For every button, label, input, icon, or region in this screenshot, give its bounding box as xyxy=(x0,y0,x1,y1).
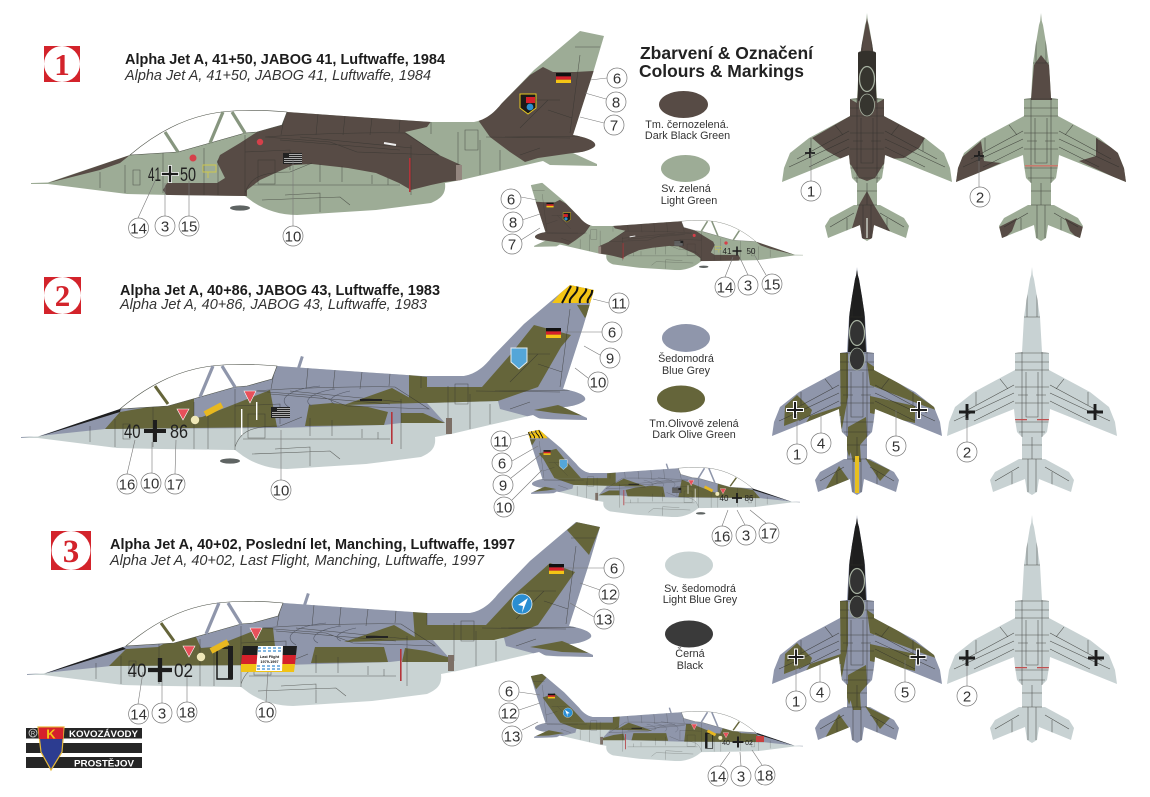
aircraft: large side view 1: 41 xyxy=(148,165,161,186)
aircraft: large side view 3: 40 xyxy=(128,661,146,682)
aircraft: underside view 2 xyxy=(942,262,1122,502)
panel: scheme 3 xyxy=(16,510,1122,786)
swatch: dark olive green: Dark Olive Green xyxy=(652,429,736,441)
callouts: scheme 1 numbers: 2 xyxy=(976,190,984,206)
swatch: blue grey xyxy=(658,324,714,377)
callouts: scheme 3 numbers: 12 xyxy=(601,586,617,604)
callouts: scheme 2 numbers: 10 xyxy=(273,482,289,500)
decal: Last Flight banner: 1979-1997 xyxy=(260,660,279,664)
heading: scheme 2 title xyxy=(119,282,440,313)
heading: legend title: Zbarvení & Označení xyxy=(640,43,814,63)
heading: scheme 1 title xyxy=(124,51,446,84)
aircraft: small side view 1: 50 xyxy=(747,247,756,256)
aircraft: underside view 3 xyxy=(942,510,1122,750)
callouts: scheme 2 numbers: 9 xyxy=(606,350,614,368)
swatch: dark black green: Dark Black Green xyxy=(645,130,730,142)
callouts: scheme 2 numbers: 10 xyxy=(143,476,159,492)
decal: Last Flight banner xyxy=(241,646,297,672)
heading: legend title: Colours & Markings xyxy=(639,61,804,81)
aircraft: top view 3 xyxy=(767,510,947,750)
callouts: scheme 3 numbers: 18 xyxy=(179,704,195,722)
callouts: scheme 1 numbers xyxy=(129,68,990,297)
heading: scheme 1 title: Alpha Jet A, 41+50, JABOG 41, Luftwaffe, 1984 xyxy=(124,68,431,84)
aircraft: large side view 1 xyxy=(20,20,620,230)
callouts: scheme 3 numbers: 6 xyxy=(610,560,618,578)
callouts: scheme 3 numbers: 14 xyxy=(130,706,147,724)
aircraft: small side view 3 xyxy=(523,668,808,768)
callouts: scheme 3 numbers: 13 xyxy=(504,728,520,746)
heading: legend title xyxy=(639,43,814,81)
heading: scheme 2 title: Alpha Jet A, 40+86, JABOG 43, Luftwaffe, 1983 xyxy=(120,282,440,299)
aircraft: small side view 3: 02 xyxy=(745,740,753,747)
aircraft: large side view 1: 50 xyxy=(180,165,196,186)
heading: scheme 3 title xyxy=(109,536,515,569)
callouts: scheme 2 numbers: 2 xyxy=(963,444,971,462)
aircraft: top view 2 xyxy=(767,262,947,502)
callouts: scheme 3 numbers: 2 xyxy=(963,688,971,706)
aircraft: large side view 2: 86 xyxy=(170,422,188,443)
badge: scheme number 3: 3 xyxy=(63,534,79,570)
logo: Kovozávody Prostějov xyxy=(26,726,142,770)
callouts: scheme 2 numbers: 17 xyxy=(167,476,183,494)
callouts: scheme 2 numbers: 17 xyxy=(761,526,777,542)
callouts: scheme 2 numbers: 10 xyxy=(590,374,606,392)
aircraft: small side view 2 xyxy=(520,424,805,524)
callouts: scheme 3 numbers: 18 xyxy=(757,768,773,784)
swatch: dark black green xyxy=(645,91,730,142)
callouts: scheme 2 numbers: 5 xyxy=(892,438,900,456)
logo: Kovozávody Prostějov: K xyxy=(46,726,56,742)
callouts: scheme 2 numbers: 11 xyxy=(611,296,627,312)
callouts: scheme 1 numbers: 8 xyxy=(509,214,517,232)
callouts: scheme 3 numbers: 3 xyxy=(158,706,166,722)
callouts: scheme 3 numbers: 14 xyxy=(710,768,726,786)
decal: Last Flight banner: Last Flight xyxy=(260,655,280,659)
callouts: scheme 3 numbers: 1 xyxy=(792,694,800,710)
swatch: light green: Light Green xyxy=(661,195,717,207)
aircraft: small side view 2: 40 xyxy=(720,494,729,503)
callouts: scheme 1 numbers: 7 xyxy=(610,118,618,134)
swatch: black: Černá xyxy=(675,647,705,660)
swatch: light green: Sv. zelená xyxy=(661,183,711,195)
callouts: scheme 3 numbers: 3 xyxy=(737,768,745,786)
swatch: dark olive green: Tm.Olivově zelená xyxy=(649,418,739,430)
panel: scheme 1 xyxy=(20,8,1131,297)
logo: Kovozávody Prostějov: R xyxy=(31,732,36,738)
swatch: light green xyxy=(661,155,717,207)
callouts: scheme 1 numbers: 14 xyxy=(130,220,147,238)
callouts: scheme 2 numbers: 10 xyxy=(496,500,512,516)
callouts: scheme 3 numbers xyxy=(129,558,977,786)
callouts: scheme 3 numbers: 10 xyxy=(258,704,274,722)
panel: colours and markings legend xyxy=(639,43,814,672)
aircraft: underside view 1 xyxy=(951,8,1131,248)
callouts: scheme 2 numbers: 1 xyxy=(793,446,801,464)
swatch: dark black green: Tm. černozelená. xyxy=(645,119,729,131)
callouts: scheme 1 numbers: 14 xyxy=(717,280,733,296)
callouts: scheme 1 numbers: 15 xyxy=(181,218,197,236)
heading: scheme 3 title: Alpha Jet A, 40+02, Poslední let, Manching, Luftwaffe, 1997 xyxy=(110,536,515,553)
callouts: scheme 1 numbers: 8 xyxy=(612,94,620,112)
callouts: scheme 2 numbers: 6 xyxy=(608,324,616,342)
aircraft: large side view 2: 40 xyxy=(124,422,140,443)
callouts: scheme 3 numbers: 6 xyxy=(505,684,513,700)
badge: scheme number 1: 1 xyxy=(54,47,70,82)
callouts: scheme 1 numbers: 6 xyxy=(613,70,621,88)
callouts: scheme 1 numbers: 10 xyxy=(285,228,301,246)
aircraft: large side view 3 xyxy=(16,511,616,721)
panel: scheme 2 xyxy=(10,262,1122,546)
callouts: scheme 1 numbers: 1 xyxy=(807,184,815,200)
callouts: scheme 2 numbers: 6 xyxy=(498,456,506,472)
heading: scheme 3 title: Alpha Jet A, 40+02, Last Flight, Manching, Luftwaffe, 1997 xyxy=(109,553,485,569)
swatch: black xyxy=(665,620,713,672)
heading: scheme 1 title: Alpha Jet A, 41+50, JABOG 41, Luftwaffe, 1984 xyxy=(125,51,446,68)
callouts: scheme 1 numbers: 7 xyxy=(508,236,516,254)
badge: scheme number 2 xyxy=(44,277,81,314)
aircraft: small side view 2: 86 xyxy=(745,494,754,503)
callouts: scheme 2 numbers: 16 xyxy=(714,528,730,546)
callouts: scheme 2 numbers xyxy=(117,293,977,546)
callouts: scheme 3 numbers: 12 xyxy=(501,706,517,722)
swatch: blue grey: Blue Grey xyxy=(662,365,711,377)
aircraft: small side view 1: 41 xyxy=(723,247,732,256)
callouts: scheme 2 numbers: 3 xyxy=(742,528,750,544)
callouts: scheme 3 numbers: 4 xyxy=(816,684,824,702)
callouts: scheme 1 numbers: 3 xyxy=(161,218,169,236)
callouts: scheme 1 numbers: 3 xyxy=(744,278,752,294)
swatch: light blue grey: Light Blue Grey xyxy=(663,594,738,606)
swatch: light blue grey xyxy=(663,552,738,606)
badge: scheme number 2: 2 xyxy=(55,278,70,313)
callouts: scheme 2 numbers: 11 xyxy=(493,434,509,450)
swatch: light blue grey: Sv. šedomodrá xyxy=(664,583,736,595)
aircraft: large side view 2 xyxy=(10,274,610,484)
heading: scheme 2 title: Alpha Jet A, 40+86, JABOG 43, Luftwaffe, 1983 xyxy=(119,297,427,313)
aircraft: small side view 1 xyxy=(523,178,808,277)
aircraft: small side view 3: 40 xyxy=(722,740,730,747)
swatch: blue grey: Šedomodrá xyxy=(658,352,714,365)
swatch: dark olive green xyxy=(649,386,739,441)
swatch: black: Black xyxy=(677,660,704,672)
logo: Kovozávody Prostějov: KOVOZÁVODY xyxy=(69,729,139,740)
aircraft: top view 1 xyxy=(777,8,957,248)
callouts: scheme 2 numbers: 16 xyxy=(119,476,135,494)
aircraft: large side view 3: 02 xyxy=(174,661,193,682)
callouts: scheme 1 numbers: 6 xyxy=(507,192,515,208)
callouts: scheme 2 numbers: 9 xyxy=(499,478,507,494)
badge: scheme number 1 xyxy=(44,46,80,82)
callouts: scheme 2 numbers: 4 xyxy=(817,436,825,452)
callouts: scheme 3 numbers: 5 xyxy=(901,684,909,702)
badge: scheme number 3 xyxy=(51,531,91,570)
callouts: scheme 1 numbers: 15 xyxy=(764,276,780,294)
logo: Kovozávody Prostějov: PROSTĚJOV xyxy=(74,758,135,770)
callouts: scheme 3 numbers: 13 xyxy=(596,612,612,628)
